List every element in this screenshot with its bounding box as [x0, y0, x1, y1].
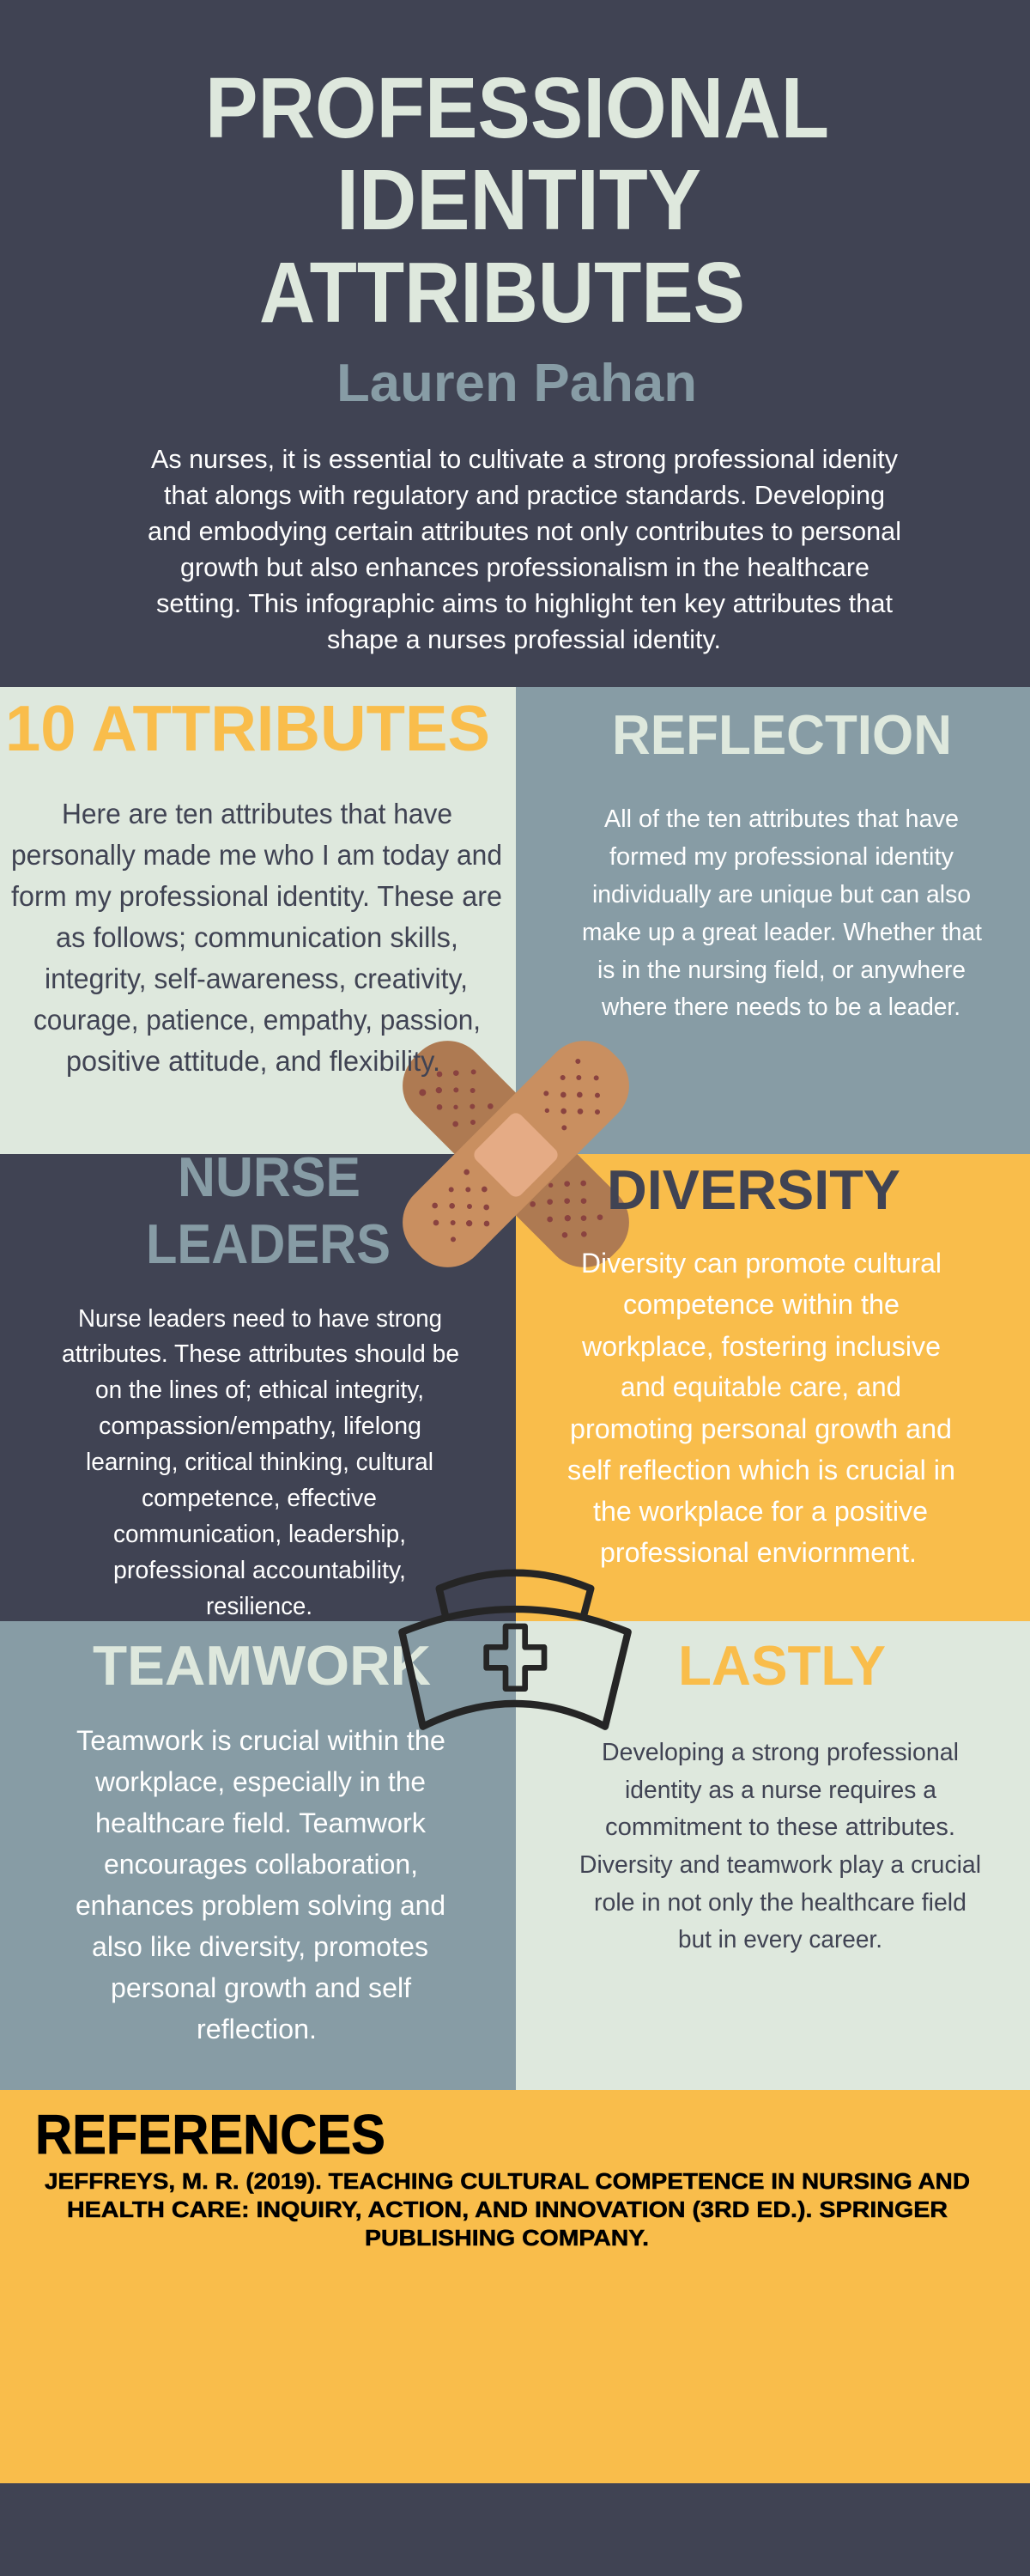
heading: nurse leaders: [146, 1145, 391, 1275]
icon: nurse cap: [402, 1573, 628, 1727]
body: reflection: formed my professional identity: [609, 843, 954, 871]
heading: references: REFERENCES: [35, 2103, 385, 2166]
panel text: teamwork: [76, 1634, 445, 2044]
title: ATTRIBUTES: [259, 245, 745, 341]
body: diversity: promoting personal growth and: [570, 1413, 952, 1444]
body: 10 attributes: positive attitude, and flexibility.: [66, 1045, 440, 1077]
intro text: As nurses, it is essential to cultivate a strong professional idenity: [151, 444, 898, 474]
panel background: teamwork: [0, 1621, 516, 2090]
body: reflection: individually are unique but can also: [592, 881, 971, 908]
heading: lastly: LASTLY: [678, 1634, 886, 1697]
body: 10 attributes: personally made me who I am today and: [11, 839, 502, 871]
panel text: references: [35, 2103, 970, 2251]
body: teamwork: enhances problem solving and: [76, 1890, 445, 1921]
reference citation: HEALTH CARE: INQUIRY, ACTION, AND INNOVATION (3RD ED.). SPRINGER: [67, 2196, 948, 2222]
panel text: nurse leaders: [62, 1145, 459, 1620]
body: reflection: where there needs to be a leader.: [601, 993, 960, 1021]
body: teamwork: personal growth and self: [111, 1972, 411, 2003]
body: nurse leaders: communication, leadership,: [113, 1521, 406, 1548]
panel background: lastly: [516, 1621, 1030, 2090]
reference citation: [45, 2168, 970, 2251]
body: lastly: role in not only the healthcare field: [594, 1889, 966, 1917]
body: diversity: [567, 1248, 955, 1568]
body: diversity: workplace, fostering inclusive: [581, 1331, 941, 1362]
intro text: growth but also enhances professionalism in the healthcare: [180, 552, 869, 582]
body: lastly: commitment to these attributes.: [605, 1814, 955, 1841]
body: nurse leaders: competence, effective: [142, 1485, 377, 1512]
body: diversity: the workplace for a positive: [593, 1496, 928, 1527]
heading: 10 attributes: 10 ATTRIBUTES: [5, 692, 490, 764]
body: diversity: competence within the: [623, 1289, 900, 1320]
heading: teamwork: TEAMWORK: [93, 1634, 431, 1697]
body: teamwork: reflection.: [197, 2014, 317, 2044]
reference citation: PUBLISHING COMPANY.: [365, 2225, 649, 2251]
body: nurse leaders: compassion/empathy, lifelong: [99, 1413, 421, 1440]
body: lastly: Developing a strong professional: [602, 1739, 959, 1766]
intro text: and embodying certain attributes not only contributes to personal: [148, 516, 901, 546]
body: diversity: and equitable care, and: [621, 1371, 901, 1402]
panel text: reflection: [582, 703, 982, 1021]
body: diversity: Diversity can promote cultural: [581, 1248, 942, 1279]
panel background: 10 attributes: [0, 687, 516, 1154]
panel background: nurse leaders: [0, 1154, 516, 1621]
intro text: shape a nurses professial identity.: [327, 624, 721, 654]
body: lastly: Diversity and teamwork play a crucial: [579, 1851, 981, 1879]
body: 10 attributes: as follows; communication skills,: [56, 921, 458, 953]
panel text: 10 attributes: [5, 692, 502, 1077]
intro text: setting. This infographic aims to highlight ten key attributes that: [156, 588, 893, 618]
body: reflection: is in the nursing field, or anywhere: [597, 957, 966, 984]
body: teamwork: encourages collaboration,: [104, 1849, 418, 1880]
title: [205, 60, 829, 341]
body: 10 attributes: Here are ten attributes that have: [62, 798, 452, 829]
intro text: [148, 444, 901, 654]
body: lastly: identity as a nurse requires a: [625, 1777, 936, 1804]
body: 10 attributes: [11, 798, 502, 1077]
body: reflection: All of the ten attributes that have: [604, 805, 959, 833]
body: nurse leaders: resilience.: [206, 1593, 312, 1620]
body: reflection: [582, 805, 982, 1021]
body: 10 attributes: courage, patience, empathy, passion,: [33, 1004, 481, 1036]
body: diversity: professional enviornment.: [600, 1537, 917, 1568]
body: lastly: [579, 1739, 981, 1953]
body: diversity: self reflection which is crucial in: [567, 1455, 955, 1485]
panel background: diversity: [516, 1154, 1030, 1621]
author name: Lauren Pahan: [336, 354, 697, 413]
body: 10 attributes: integrity, self-awareness, creativity,: [45, 963, 468, 994]
heading: nurse leaders: LEADERS: [146, 1212, 391, 1275]
body: nurse leaders: on the lines of; ethical integrity,: [95, 1376, 424, 1404]
body: teamwork: Teamwork is crucial within the: [76, 1725, 445, 1756]
title: IDENTITY: [336, 152, 701, 248]
body: reflection: make up a great leader. Whether that: [582, 919, 982, 946]
panel text: lastly: [579, 1634, 981, 1953]
body: teamwork: healthcare field. Teamwork: [95, 1807, 427, 1838]
body: teamwork: also like diversity, promotes: [92, 1931, 428, 1962]
heading: reflection: REFLECTION: [612, 703, 952, 766]
body: nurse leaders: attributes. These attributes should be: [62, 1340, 459, 1368]
title: PROFESSIONAL: [205, 60, 829, 156]
reference citation: JEFFREYS, M. R. (2019). TEACHING CULTURAL COMPETENCE IN NURSING AND: [45, 2168, 970, 2194]
body: nurse leaders: professional accountability,: [113, 1557, 406, 1584]
body: teamwork: [76, 1725, 445, 2044]
body: nurse leaders: learning, critical thinking, cultural: [86, 1449, 433, 1476]
panel background: references: [0, 2090, 1030, 2483]
panel background: reflection: [516, 687, 1030, 1154]
body: nurse leaders: [62, 1305, 459, 1620]
body: lastly: but in every career.: [678, 1926, 882, 1953]
heading: diversity: DIVERSITY: [607, 1158, 900, 1221]
body: 10 attributes: form my professional identity. These are: [11, 880, 502, 912]
body: nurse leaders: Nurse leaders need to have strong: [78, 1305, 442, 1333]
intro text: that alongs with regulatory and practice standards. Developing: [164, 480, 885, 510]
panel text: diversity: [567, 1158, 955, 1568]
icon: crossed bandages: [386, 1024, 645, 1284]
heading: nurse leaders: NURSE: [178, 1145, 360, 1208]
body: teamwork: workplace, especially in the: [94, 1766, 426, 1797]
header block: [148, 60, 901, 654]
